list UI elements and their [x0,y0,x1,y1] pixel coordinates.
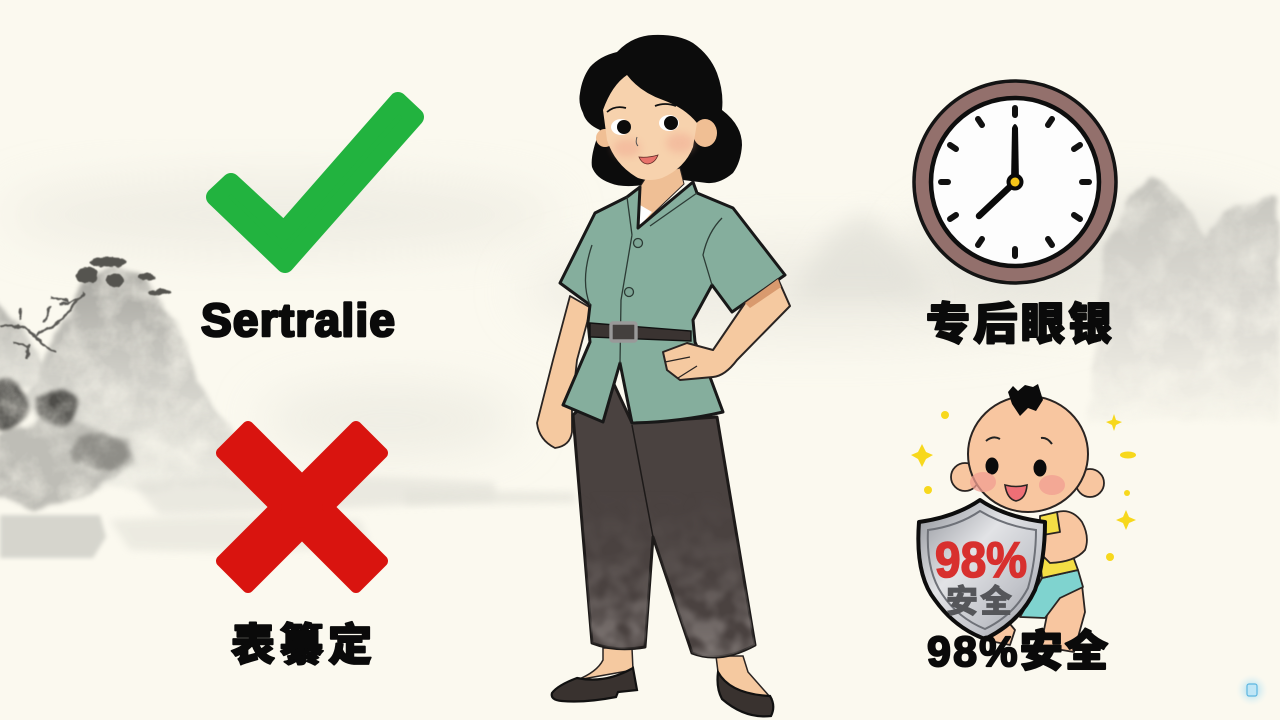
undershirt [638,205,652,228]
foliage on the peak [76,257,171,295]
clock hands [979,124,1024,216]
feet [577,648,771,698]
hair [579,35,742,186]
belt [590,323,691,341]
illustration: standing woman [537,35,790,716]
icon: watermark badge [1236,674,1268,706]
trousers [572,384,756,658]
label: 表纂定: 表纂定 [231,621,372,670]
shield text: 安全: 安全 [946,583,1012,619]
shirt [560,182,785,423]
face [596,75,717,180]
shield text: 98%: 98% [935,532,1027,588]
baby body [985,511,1087,652]
sparkles [911,411,1136,561]
left arm [537,296,591,448]
icon: green check mark [215,101,415,264]
icon: red cross [222,427,382,587]
neck [638,168,684,228]
shield [918,500,1045,639]
icon: baby with shield [911,384,1136,652]
label: 98%安全: 98%安全 [927,628,1108,676]
right mountains [1085,177,1280,420]
shoes [552,668,773,716]
icon: clock [914,81,1116,283]
label: Sertralie: Sertralie [201,294,395,346]
right arm and hand [663,279,790,380]
baby head [951,384,1104,512]
label: 专后眼银: 专后眼银 [926,300,1112,349]
left mountains [0,257,575,558]
